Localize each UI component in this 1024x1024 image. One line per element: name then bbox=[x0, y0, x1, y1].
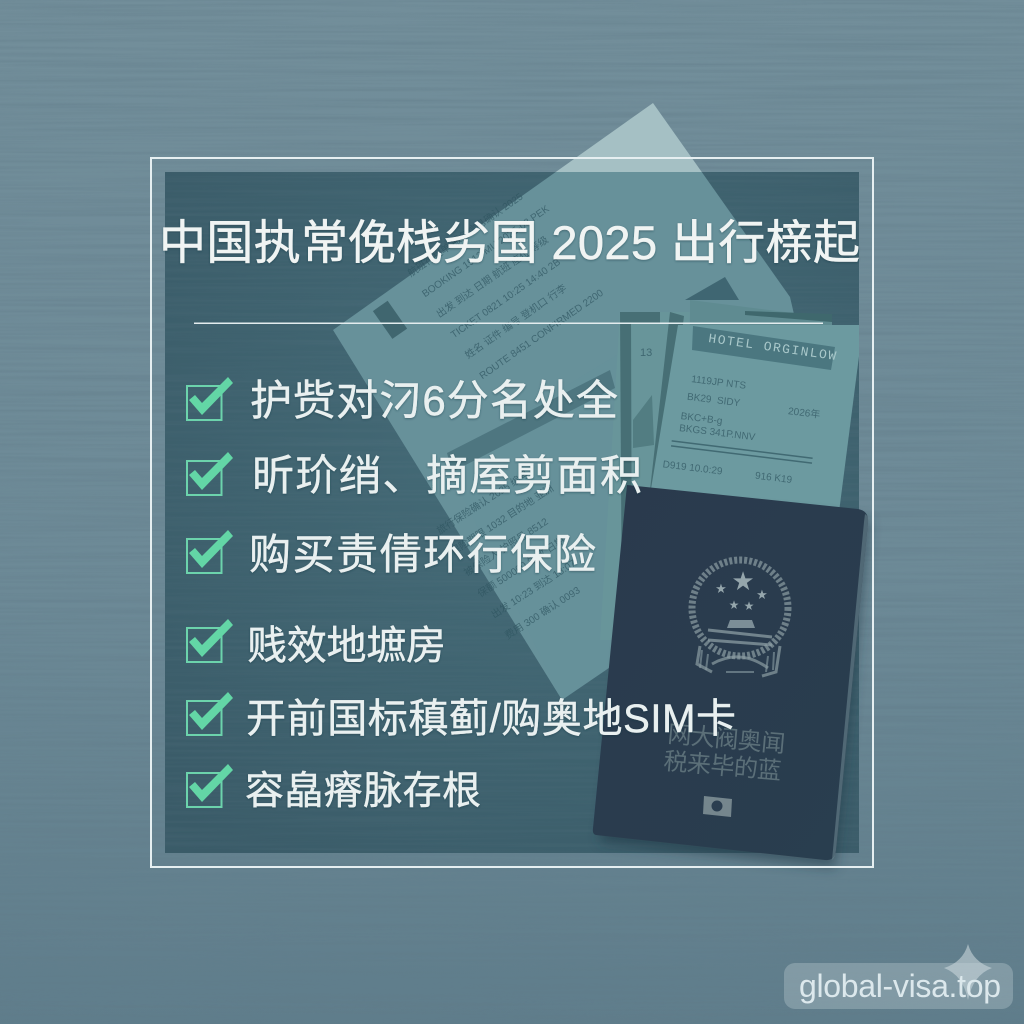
travel documents bbox=[333, 172, 859, 698]
hotel confirmation paper: 916 K19 bbox=[754, 471, 793, 486]
lower insurance paper: 保额 500000 生效 日期 bbox=[475, 534, 567, 600]
lower insurance paper: 保险期限 1032 目的地 亚洲 bbox=[448, 481, 556, 558]
back itinerary paper: 航班行程单 服务信息确认 2025 bbox=[405, 190, 526, 280]
hotel confirmation paper: 2026年 bbox=[787, 404, 821, 421]
item: saved documents: 容皛瘠脉存根 bbox=[245, 770, 481, 813]
watermark bbox=[784, 944, 1013, 1009]
hotel confirmation paper bbox=[650, 325, 863, 520]
icon: national emblem: ★ bbox=[729, 598, 739, 612]
passport bbox=[593, 485, 870, 868]
translucent panel bbox=[165, 172, 859, 853]
lower insurance paper: 旅行保险确认 2025 编号 bbox=[434, 467, 532, 537]
checklist bbox=[187, 377, 736, 813]
item: documents: 昕玠绡、摘庢剪面积 bbox=[252, 452, 642, 499]
passport cover text: 网大阀奥闻 bbox=[666, 721, 786, 758]
item: roaming and SIM card: 开前国标稹蓟/购奥地SIM卡 bbox=[246, 697, 736, 741]
back itinerary paper: TICKET 0821 10:25 14:40 2B bbox=[449, 257, 563, 341]
item: local housing: 贱效地墌房 bbox=[247, 624, 446, 668]
passport cover text: 税来毕的蓝 bbox=[662, 748, 782, 785]
hotel confirmation paper: BK29 SIDY bbox=[686, 392, 741, 409]
back itinerary paper: BOOKING 1912 MU 2025-08 PEK bbox=[420, 203, 552, 300]
icon: national emblem: ★ bbox=[744, 599, 754, 613]
back itinerary paper: 出发 到达 日期 航班 座位 等级 bbox=[434, 233, 551, 320]
item: travel insurance: 购买责倩环行保险 bbox=[249, 531, 596, 578]
icon: national emblem bbox=[692, 560, 788, 676]
title divider bbox=[194, 322, 823, 324]
icon: national emblem: ★ bbox=[756, 588, 768, 603]
paper behind hotel bbox=[690, 300, 832, 325]
watermark: global-visa.top bbox=[799, 968, 1001, 1004]
icon: national emblem: ★ bbox=[731, 567, 755, 597]
icon: sparkle bbox=[944, 944, 992, 1000]
lower insurance paper: 出发 10:23 到达 18:07 bbox=[489, 556, 578, 621]
banknotes: 13 bbox=[640, 347, 652, 359]
lower insurance paper: 费用 300 确认 0093 bbox=[502, 583, 583, 642]
paper corner above panel bbox=[333, 103, 790, 700]
passport cover text bbox=[662, 721, 786, 785]
hotel confirmation paper: 1119JP NTS bbox=[691, 374, 747, 392]
back itinerary paper: 姓名 证件 编号 登机口 行李 bbox=[462, 281, 569, 361]
lower insurance paper: 被保险人 护照号 8512 bbox=[461, 515, 551, 579]
lower insurance paper bbox=[436, 370, 615, 698]
back itinerary paper: ROUTE 8451 CONFIRMED 2200 bbox=[478, 288, 606, 382]
icon: biometric chip bbox=[703, 796, 732, 817]
hotel confirmation paper: D919 10.0:29 bbox=[662, 459, 723, 478]
hotel confirmation paper: BKGS 341P.NNV bbox=[679, 423, 756, 443]
frame bbox=[151, 158, 873, 867]
back itinerary paper bbox=[333, 172, 794, 698]
hotel confirmation paper: HOTEL ORGINLOW bbox=[707, 331, 838, 364]
icon: national emblem: ★ bbox=[715, 582, 727, 597]
title: 中国执常俛栈劣国 2025 出行榇起 bbox=[159, 216, 860, 269]
item: local housing bbox=[187, 619, 446, 668]
item: passport validity: 护赀对汈6分名处全 bbox=[250, 377, 618, 424]
banknotes bbox=[620, 312, 684, 540]
hotel confirmation paper: BKC+B-g bbox=[680, 411, 723, 427]
